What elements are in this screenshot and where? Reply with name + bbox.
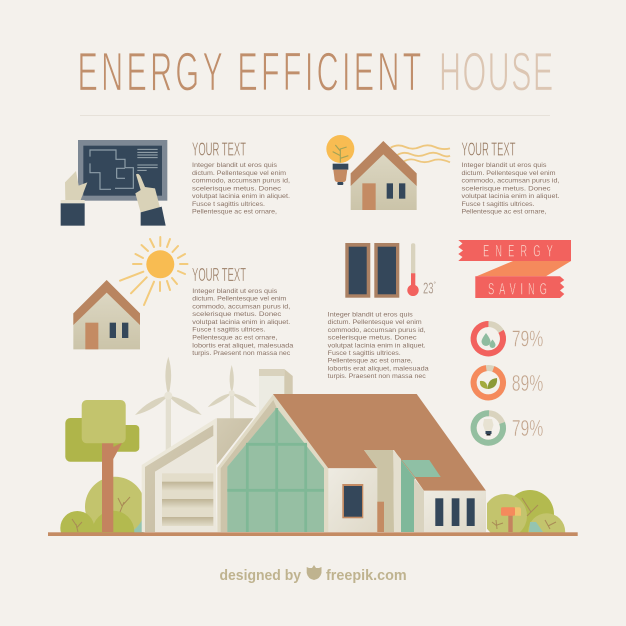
turbine: small (208, 365, 257, 421)
paragraph: Pellentesque ac est ornare, (192, 208, 277, 216)
icon: double window (345, 243, 399, 298)
turbine: large (135, 357, 202, 450)
ribbon: energy saving: ENERGY (483, 242, 553, 260)
text block: middle centre: lobortis erat aliquet, malesuada (328, 365, 429, 372)
ribbon: energy saving (458, 240, 571, 298)
icon: thermometer (407, 243, 436, 297)
icon: bulb, house and heat waves (326, 135, 450, 210)
paragraph: commodo, accumsan purus id, (192, 178, 290, 185)
paragraph: Integer blandit ut eros quis (462, 162, 547, 169)
text block: middle centre: volutpat lacinia enim in aliquet. (328, 342, 426, 349)
text block: middle centre: dictum. Pellentesque vel enim (328, 319, 422, 326)
paragraph: commodo, accumsan purus id, (192, 303, 290, 310)
text block: top right (462, 138, 560, 216)
paragraph: dictum. Pellentesque vel enim (192, 170, 286, 177)
text block: middle left (192, 264, 294, 357)
heading: YOUR TEXT (462, 138, 516, 160)
footer credit (220, 565, 407, 584)
paragraph: lobortis erat aliquet, malesuada (192, 342, 294, 349)
heading: YOUR TEXT (192, 264, 246, 285)
ground line (48, 532, 578, 536)
stat: leaf 89%: 89% (512, 370, 543, 396)
wind turbines (135, 357, 257, 450)
garage shutter (162, 473, 213, 526)
paragraph: Integer blandit ut eros quis (192, 288, 278, 295)
text block: middle centre (328, 312, 429, 380)
infographic (48, 52, 578, 583)
paragraph: scelerisque metus. Donec (192, 185, 282, 192)
stat: light bulb 79%: 79% (512, 415, 543, 441)
footer credit: freepik.com (326, 568, 407, 584)
paragraph: Fusce t sagittis ultrices. (462, 201, 535, 208)
icon: thermometer: ° (434, 282, 436, 288)
icon: house (73, 280, 140, 349)
tree and left bushes (60, 400, 144, 532)
text block: middle centre: turpis. Praesent non massa nec (328, 373, 426, 380)
house: main roof (273, 394, 486, 491)
stat: water 79% (468, 319, 543, 359)
paragraph: Fusce t sagittis ultrices. (192, 327, 265, 334)
paragraph: Pellentesque ac est ornare, (462, 208, 547, 216)
stat: leaf 89% (469, 364, 543, 402)
text block: middle centre: Pellentesque ac est ornare, (328, 358, 413, 365)
paragraph: dictum. Pellentesque vel enim (192, 296, 287, 303)
ribbon: energy saving: SAVING (488, 279, 547, 298)
text block: top left (192, 138, 290, 216)
title: HOUSE (439, 42, 553, 103)
paragraph (462, 162, 560, 216)
paragraph: dictum. Pellentesque vel enim (462, 170, 556, 177)
paragraph: commodo, accumsan purus id, (462, 178, 560, 185)
paragraph: Fusce t sagittis ultrices. (192, 201, 265, 208)
icon: hands on blueprint tablet (61, 140, 167, 226)
right bushes and mailbox (487, 490, 566, 532)
house: right wing (328, 450, 486, 532)
paragraph: volutpat lacinia enim in aliquet. (192, 193, 290, 200)
footer credit: designed by (220, 568, 301, 584)
text block: middle centre: Fusce t sagittis ultrices. (328, 350, 401, 357)
stat: light bulb 79% (469, 409, 543, 447)
chimney (259, 369, 293, 418)
stat: water 79%: 79% (512, 326, 543, 352)
paragraph (192, 162, 290, 216)
paragraph: scelerisque metus. Donec (192, 311, 282, 318)
paragraph: scelerisque metus. Donec (462, 185, 551, 192)
paragraph: turpis. Praesent non massa nec (192, 350, 291, 357)
paragraph: volutpat lacinia enim in aliquet. (462, 193, 560, 200)
text block: middle centre: Integer blandit ut eros quis (328, 312, 413, 318)
heading: YOUR TEXT (192, 138, 246, 160)
house: glass gable (217, 394, 330, 532)
text block: middle centre: scelerisque metus. Donec (328, 335, 417, 342)
paragraph: Pellentesque ac est ornare, (192, 334, 277, 342)
house: left wing (142, 418, 253, 532)
icon: sun (120, 237, 188, 305)
text block: middle centre: commodo, accumsan purus id, (328, 327, 426, 334)
paragraph: Integer blandit ut eros quis (192, 162, 278, 169)
icon: freepik crown (307, 565, 322, 580)
paragraph: volutpat lacinia enim in aliquet. (192, 319, 290, 326)
title: ENERGY EFFICIENT (78, 42, 421, 103)
icon: thermometer: 23 (423, 280, 434, 297)
paragraph (192, 288, 294, 357)
